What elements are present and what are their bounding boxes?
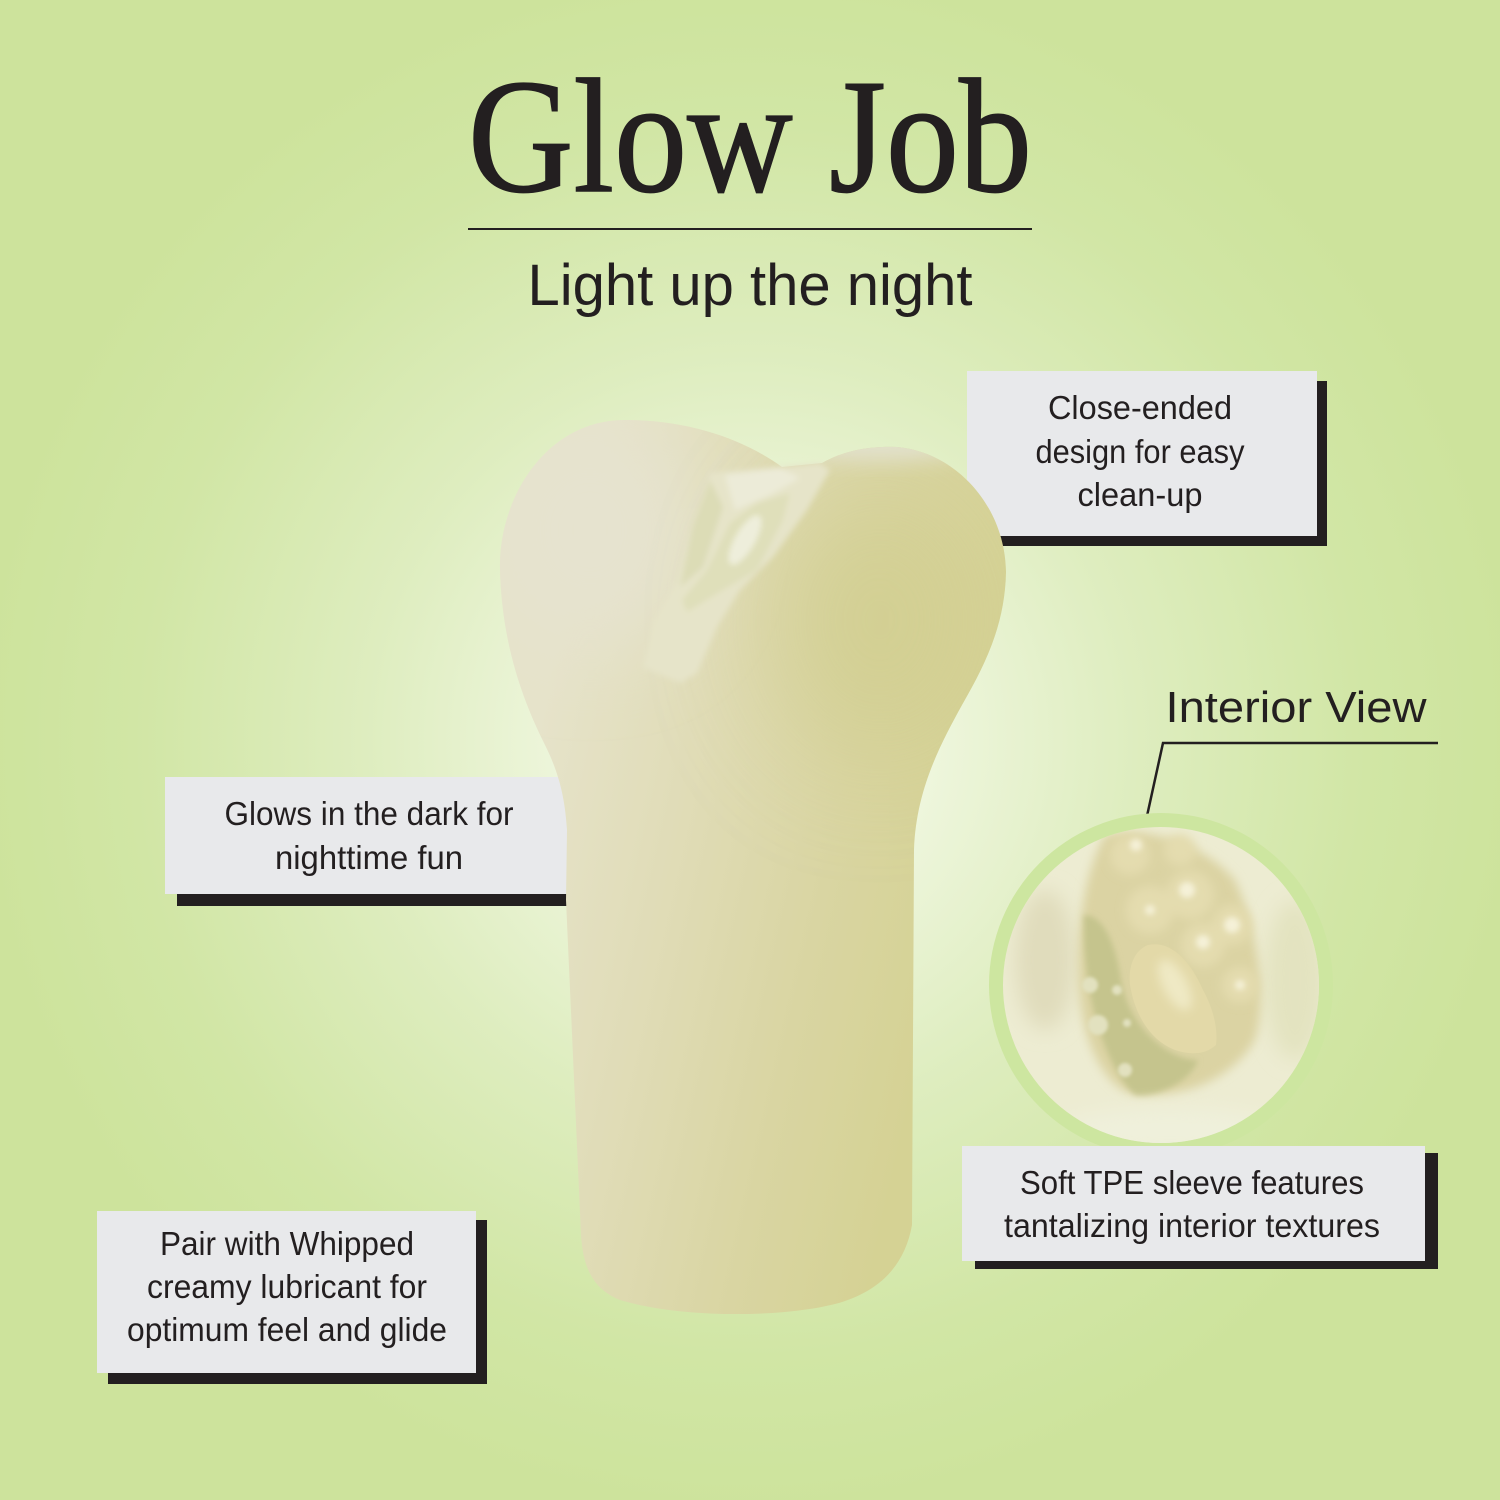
- callout: glows in the dark: nighttime fun: [275, 839, 463, 876]
- callout: close-ended design: design for easy: [1036, 433, 1245, 470]
- callout: pair with whipped: creamy lubricant for: [147, 1268, 427, 1305]
- subtitle: Light up the night: [528, 253, 972, 318]
- product surface folds: [643, 463, 830, 683]
- product illustration: [480, 410, 1006, 1314]
- title: Glow Job: [468, 47, 1032, 227]
- callout: soft TPE sleeve: tantalizing interior textures: [1004, 1207, 1380, 1244]
- callout: glows in the dark: [165, 777, 567, 906]
- callout: pair with whipped: optimum feel and glide: [127, 1311, 447, 1348]
- callout: pair with whipped: Pair with Whipped: [160, 1225, 414, 1262]
- callout: close-ended design: Close-ended: [1048, 389, 1232, 426]
- callout: soft TPE sleeve: [962, 1146, 1438, 1269]
- callout: close-ended design: clean-up: [1078, 476, 1202, 513]
- interior view label: [1147, 683, 1438, 816]
- callout: glows in the dark: Glows in the dark for: [224, 795, 514, 832]
- callout: pair with whipped: [97, 1211, 487, 1384]
- interior view label: Interior View: [1166, 683, 1427, 732]
- interior view image: [989, 813, 1333, 1157]
- callout: close-ended design: [967, 371, 1327, 546]
- callout: soft TPE sleeve: Soft TPE sleeve features: [1020, 1164, 1364, 1201]
